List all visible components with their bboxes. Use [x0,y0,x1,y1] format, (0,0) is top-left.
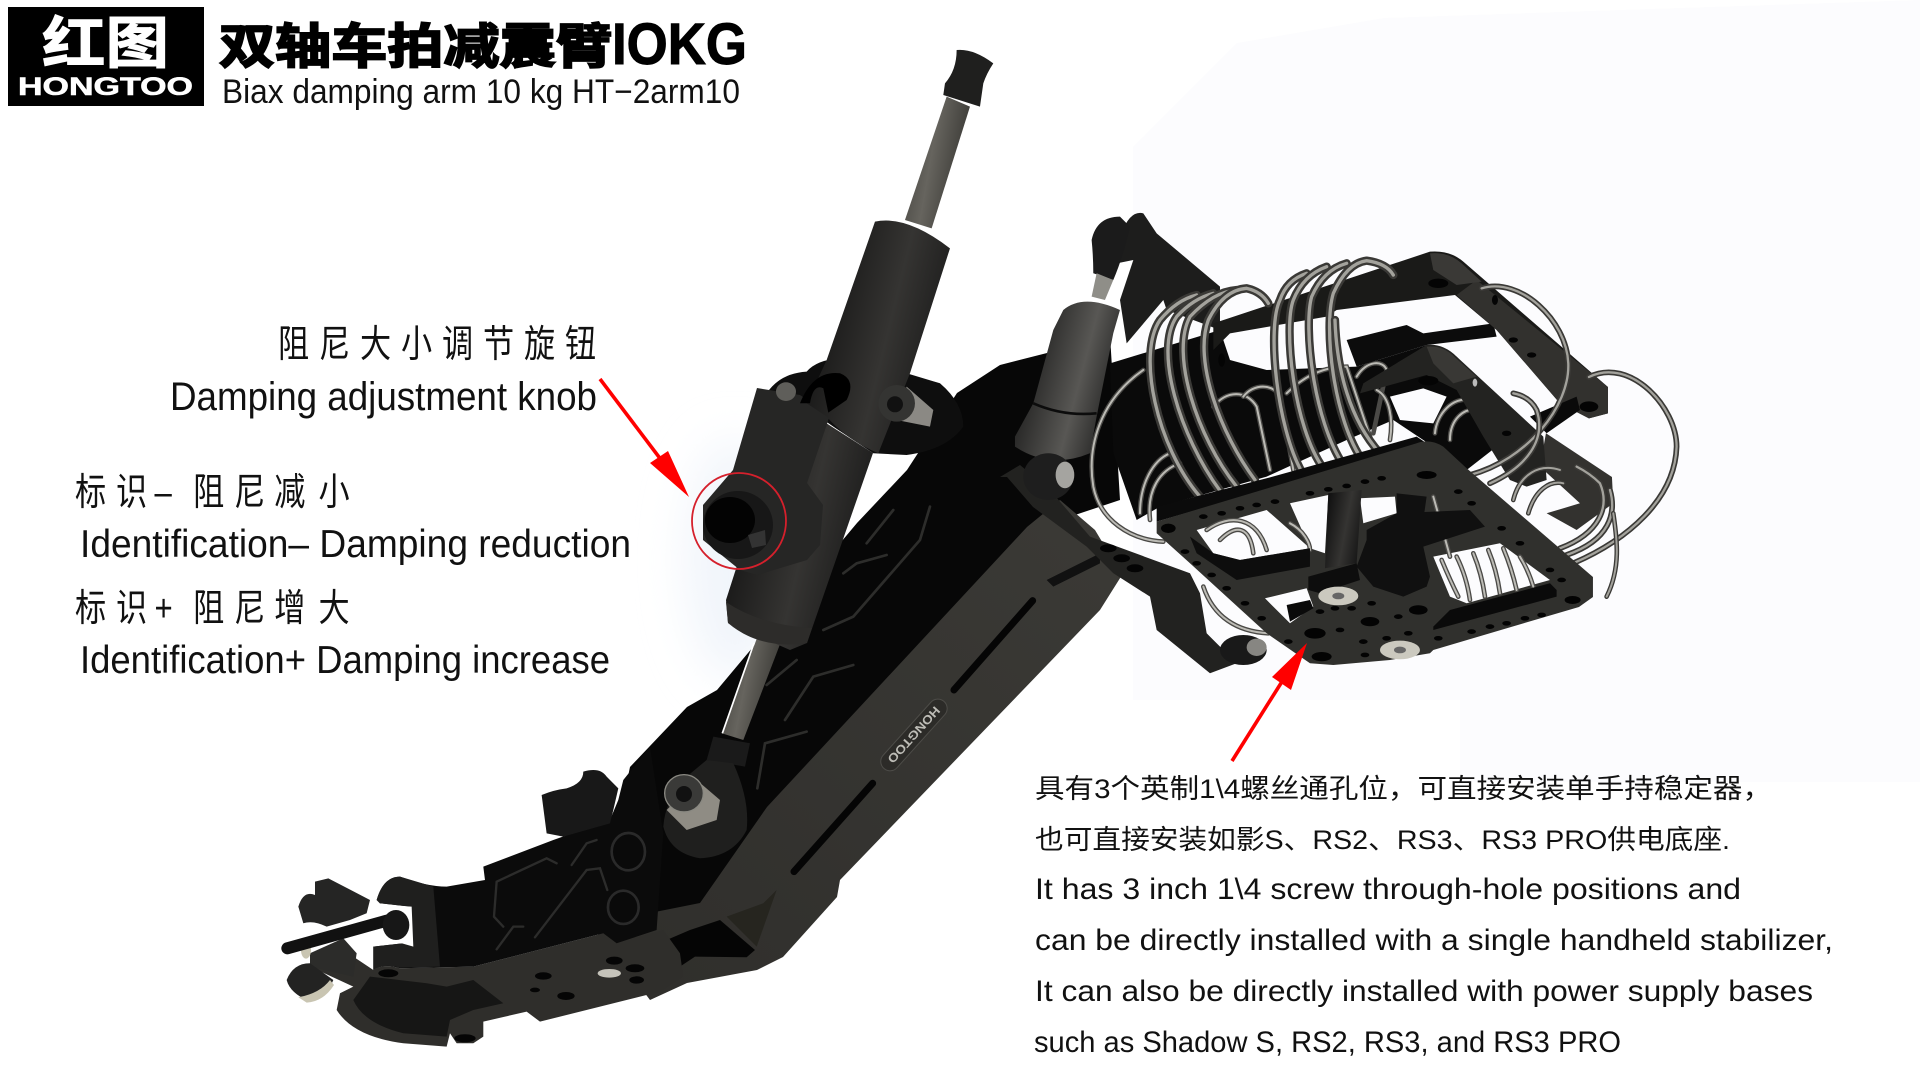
top frame highlight [1430,253,1482,285]
wing cube [298,878,370,927]
clamp notch [380,905,413,947]
front plate holes [1161,471,1581,661]
clamp screw rod [287,921,387,948]
arm slots [794,601,1033,872]
description text block: It has 3 inch 1\4 screw through-hole positions and [1035,873,1741,906]
lower rod [722,630,782,740]
small damper ball [1023,453,1073,500]
ball highlight [1056,462,1074,488]
ball joint [383,910,409,940]
plate holes [378,957,644,1042]
arm recess [643,920,755,973]
front plate [1157,441,1593,665]
back coils [1140,363,1480,520]
lower cylinder rim [726,602,812,644]
product: main damper [767,50,993,455]
dark back structure [1110,330,1497,520]
lower right frame [1540,433,1613,530]
top frame right face [1457,280,1608,418]
product: main arm [590,335,1122,1000]
callout: damping adjustment knob Chinese label: 阻尼大小调节旋钮 [278,323,596,366]
description text block: It can also be directly installed with power supply bases [1035,975,1813,1008]
description text block: such as Shadow S, RS2, RS3, and RS3 PRO [1034,1026,1621,1059]
rod collar [707,737,750,767]
fork eyelet [663,760,747,858]
label: plus increases damping, Chinese: 标识+阻尼增大 [75,587,350,630]
bracket holes [1100,544,1143,572]
lower ball [1220,635,1267,665]
centre block [1357,510,1485,597]
product: lower rod and eyelet [663,630,782,858]
title: Chinese product name: 双轴车拍减震臂 [219,21,612,74]
right lower bar [1433,583,1557,630]
right big ring lower [1574,372,1677,563]
wing lower block [310,938,357,977]
label: minus reduces damping, English: Identification– Damping reduction [80,523,631,566]
rear knob [542,770,618,837]
small damper rod [1092,273,1113,300]
arm back plate [600,335,1120,930]
lower plate [310,930,683,1047]
damper upper rod [905,97,970,228]
rear standoff [1397,493,1427,520]
label: plus increases damping, English: Identification+ Damping increase [80,639,610,682]
top frame holes [1218,279,1598,412]
collar [767,358,963,455]
upper link bracket [1117,213,1220,343]
damping adjustment knob [703,491,773,559]
highlight circle: damping knob [692,473,786,569]
small damper body [1015,302,1120,460]
window strands right [1433,497,1533,600]
front coil group B [1274,261,1393,472]
description text block [1034,774,1833,1059]
right big ring upper [1470,286,1568,475]
clamp dish [353,977,503,1037]
small damper ball end [1092,217,1130,280]
arrow: to damping knob [600,379,689,497]
bar two [1347,323,1497,367]
lower ring [1203,587,1268,633]
collar bolt [878,385,933,427]
arrow: to screw holes [1232,643,1307,761]
arm rear screw rings [607,837,643,924]
back ring left [1092,370,1163,542]
body raised outlines [494,840,607,949]
logo: Hongtoo [8,7,204,106]
product: small damper [1015,217,1130,500]
bolt hex [676,786,692,802]
recess triangle [727,890,777,947]
rod highlight [722,643,754,733]
title: 10KG: IOKG [612,12,747,77]
left inner bar [1190,537,1310,580]
centre post [1325,490,1362,568]
body band [1033,403,1097,414]
logo: Hongtoo: HONGTOO [18,73,193,101]
front coil group A [1150,288,1268,497]
background: pale blue glow beside arm [685,440,785,680]
chevron outlines [757,507,930,788]
middle frame [1360,345,1547,487]
cream washer top [301,941,311,959]
top frame [1213,251,1608,418]
right extra rings [1490,393,1617,597]
label: minus reduces damping, Chinese: 标识–阻尼减小 [75,471,350,514]
lower cylinder [726,400,873,650]
description text block: can be directly installed with a single handheld stabilizer, [1035,924,1833,957]
upper cylinder [807,221,950,453]
HONGTOO badge [877,695,951,775]
clamp lit face [373,877,440,970]
left swing bracket [1000,465,1237,673]
window coils left [1207,520,1310,553]
middle frame highlight [1427,346,1477,383]
bolt sleeve [667,780,720,830]
silver screw B [1380,641,1420,659]
silver screw A [1318,587,1358,605]
bolt head [665,775,703,812]
back black bar right [1530,397,1580,433]
inner dark cross-bar [1157,437,1427,522]
lower window fill [1287,600,1313,622]
middle frame details [1418,376,1511,436]
silver screw [598,969,621,978]
damper top cap [943,50,993,107]
body screw rings [608,833,645,924]
upper recess [1047,553,1100,587]
callout: damping adjustment knob English label: Damping adjustment knob [170,375,597,419]
arm details (crop-space) [607,507,1100,973]
description text block: 也可直接安装如影S、RS2、RS3、RS3 PRO供电底座. [1035,825,1730,855]
HONGTOO badge: HONGTOO [885,703,943,766]
logo: Hongtoo: 红图 [42,12,169,75]
collar slot [800,373,850,413]
clamp black body [373,747,663,970]
knob bracket [703,388,830,575]
background: pale tint panel [1133,0,1920,782]
small bolt [776,382,796,401]
post foot [1308,563,1360,593]
arm grey face plate [590,500,1122,1000]
wing bottom [287,963,333,1002]
product: clamp and lower end [287,747,683,1047]
description text block: 具有3个英制1\4螺丝通孔位，可直接安装单手持稳定器， [1035,774,1772,804]
subtitle: Biax damping arm 10 kg HT−2arm10 [222,73,740,111]
cream washer bottom [298,980,334,1003]
product: spring cage [1000,213,1677,673]
